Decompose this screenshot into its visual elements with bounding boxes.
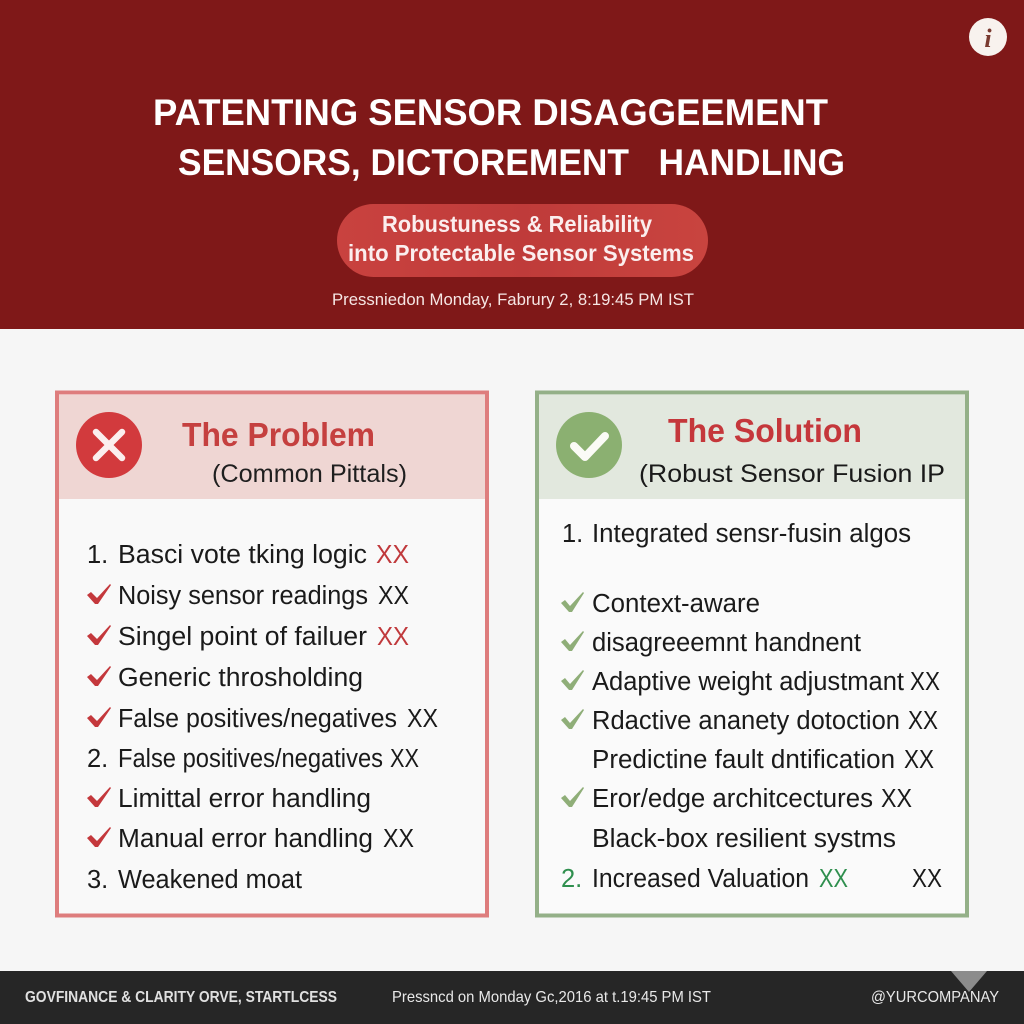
item 9 [561,865,942,893]
panel header: solution [539,395,965,499]
icon: red cross [76,412,142,478]
item 7: Eror/edge architcectures [592,785,873,813]
item 6: False positives/negatives [118,745,383,773]
icon: footer triangle [951,971,987,992]
item 1: 1. [562,520,583,548]
date line: Pressniedon Monday, Fabrury 2, 8:19:45 PM IST [332,290,694,309]
item 6: XX [390,745,419,773]
item 9: XX [912,865,942,893]
item 9: 2. [561,865,582,893]
icon: info: i [984,24,992,53]
problem list [87,541,438,894]
item 7: XX [881,785,912,813]
item 5: Rdactive ananety dotoction [592,707,900,735]
item 5: False positives/negatives [118,705,397,733]
panel header: solution: The Solution [668,412,862,449]
item 5: XX [908,707,938,735]
item 8: Black-box resilient systms [592,825,896,853]
item 1: Basci vote tking logic [118,541,367,569]
panel header: problem: (Common Pittals) [212,460,407,488]
item 9: 3. [87,866,108,894]
item 2: XX [378,582,409,610]
panel header: problem: The Problem [182,416,375,453]
item 8: XX [383,825,414,853]
subtitle pill: into Protectable Sensor Systems [348,240,694,266]
item 8: Manual error handling [118,825,373,853]
footer center text: Pressncd on Monday Gc,2016 at t.19:45 PM IST [392,989,711,1006]
item 1: XX [376,541,409,569]
header banner [0,0,1024,329]
panel: the solution [537,392,967,916]
item 6: XX [904,746,934,774]
item 6: 2. [87,745,108,773]
solution list [561,520,942,893]
subtitle pill [337,204,708,277]
item 5: XX [407,705,438,733]
item 4: Adaptive weight adjustmant [592,668,904,696]
icon: green check [556,412,622,478]
item 7: Limittal error handling [118,785,371,813]
title: PATENTING SENSOR DISAGGEEMENT [153,92,828,133]
item 4: XX [910,668,940,696]
item 3: disagreeemnt handnent [592,629,861,657]
item 4: Generic throsholding [118,664,363,692]
item 3: Singel point of failuer [118,623,368,651]
footer bar [0,971,1024,1024]
panel: the problem [57,392,487,916]
item 9: Weakened moat [118,866,302,894]
item 6: Predictine fault dntification [592,746,895,774]
subtitle pill: Robustuness & Reliability [382,211,652,237]
icon: info [969,18,1007,56]
item 9: XX [819,865,848,893]
panel header: solution: (Robust Sensor Fusion IP [639,460,945,488]
item 2: Context-aware [592,590,760,618]
item 9: Increased Valuation [592,865,809,893]
item 1: 1. [87,541,108,569]
item 3: XX [377,623,409,651]
panel header: problem [59,395,485,499]
title [153,92,845,183]
item 1: Integrated sensr-fusin algos [592,520,911,548]
item 2: Noisy sensor readings [118,582,368,610]
title: SENSORS, DICTOREMENT HANDLING [178,142,845,183]
footer left text: GOVFINANCE & CLARITY ORVE, STARTLCESS [25,989,337,1006]
footer right text: @YURCOMPANAY [871,989,999,1006]
